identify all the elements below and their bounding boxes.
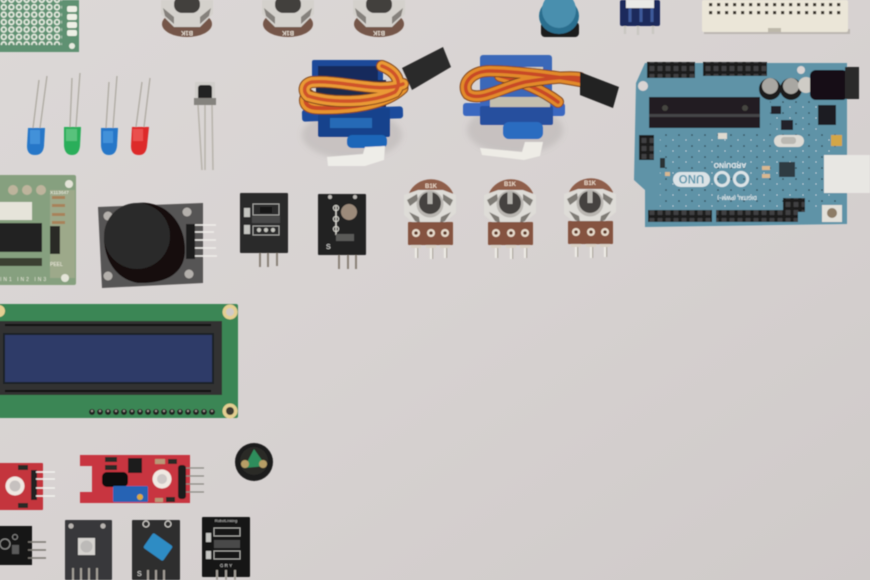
joystick module xyxy=(98,203,217,288)
servo motor left xyxy=(302,47,451,166)
potentiometer 2 xyxy=(484,179,536,259)
wiring loop xyxy=(305,66,403,108)
Arduino logo: ARDUINO xyxy=(713,161,746,168)
light sensor module: S xyxy=(326,244,331,251)
potentiometer top 2 xyxy=(262,0,314,37)
LED blue 1 xyxy=(27,76,47,155)
board silkscreen label: DIGITAL (PWM~) xyxy=(717,194,757,200)
sensor module 1 xyxy=(240,193,288,267)
wiring loop xyxy=(466,71,580,102)
USB connector xyxy=(824,155,870,193)
reset button xyxy=(822,205,842,222)
capacitors xyxy=(759,78,802,100)
mini breadboard xyxy=(702,0,850,34)
RGB LED module xyxy=(65,520,112,580)
light sensor module xyxy=(318,194,366,269)
tilt switch module: S xyxy=(137,571,142,578)
potentiometer top 1: B1K xyxy=(180,29,193,35)
regulator xyxy=(818,105,836,125)
electret microphone xyxy=(235,443,273,481)
LED group xyxy=(27,73,150,155)
perfboard xyxy=(0,0,79,52)
servo connector xyxy=(580,72,619,108)
servo horn xyxy=(480,142,543,160)
LCD display module xyxy=(0,304,238,418)
driver module board: X113647 xyxy=(50,190,69,196)
red sensor module centre xyxy=(80,455,204,503)
Arduino logo xyxy=(673,161,748,187)
servo motor right xyxy=(463,55,619,160)
black module bottom left xyxy=(0,526,46,565)
potentiometer 3 xyxy=(564,178,616,258)
LED blue 2 xyxy=(101,76,118,155)
potentiometer 1: B1K xyxy=(425,184,438,190)
microcontroller chip xyxy=(649,97,760,128)
power jack xyxy=(798,67,859,100)
tilt switch module xyxy=(132,520,180,580)
driver module board: IN1 IN2 IN3 xyxy=(0,277,48,283)
potentiometer top 3 xyxy=(353,0,405,37)
LED red xyxy=(131,78,150,155)
potentiometer top 3: B1K xyxy=(372,29,385,35)
black sensor module bottom right: G R Y xyxy=(220,563,232,568)
servo connector xyxy=(402,47,451,90)
potentiometer 3: B1K xyxy=(584,181,597,187)
slide switch xyxy=(620,0,660,35)
Arduino Uno board xyxy=(634,62,870,227)
potentiometer top 1 xyxy=(161,0,213,37)
driver module board xyxy=(0,175,76,285)
IR receiver xyxy=(194,82,216,170)
potentiometer 1 xyxy=(404,179,456,259)
LED green xyxy=(64,73,81,155)
Arduino logo: UNO xyxy=(679,172,704,184)
driver module board: PEEL xyxy=(50,262,63,268)
black sensor module bottom right xyxy=(202,517,250,580)
red sensor module left xyxy=(0,463,55,510)
push button xyxy=(539,0,579,37)
servo horn xyxy=(327,146,385,166)
potentiometer 2: B1K xyxy=(504,182,517,188)
potentiometer top 2: B1K xyxy=(281,29,294,35)
small chips xyxy=(660,106,842,178)
header pins xyxy=(639,62,805,222)
black sensor module bottom right: RobotLinking xyxy=(215,519,237,523)
crystal oscillator xyxy=(774,135,804,147)
